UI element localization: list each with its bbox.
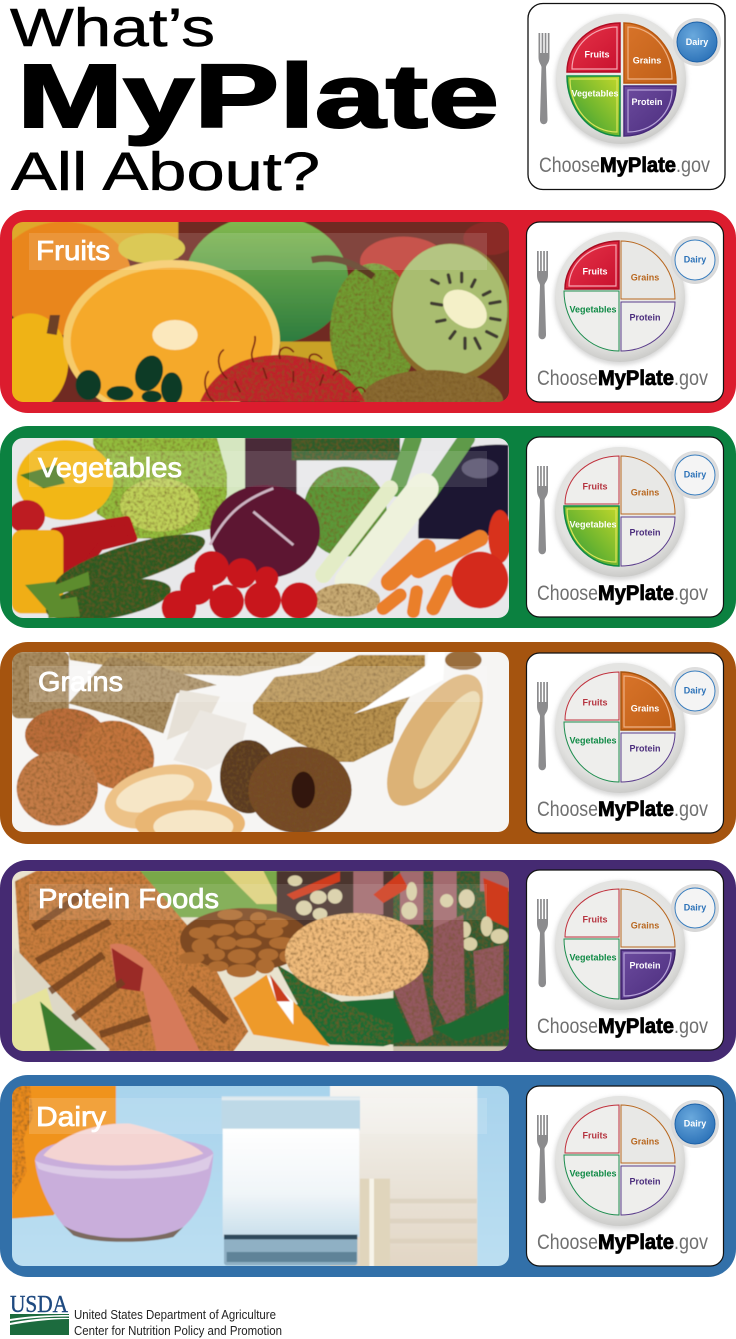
section: fruits: Fruits xyxy=(584,50,610,60)
section: grains: Grains xyxy=(633,56,661,66)
MyPlate card: Dairy xyxy=(684,902,706,912)
title: All About? xyxy=(11,142,320,202)
photo: dairy xyxy=(0,1082,520,1269)
MyPlate card xyxy=(526,1086,724,1266)
panel: vegetables xyxy=(0,426,736,629)
wordmark: Choose xyxy=(539,154,600,177)
wordmark: MyPlate xyxy=(600,154,676,177)
MyPlate card: Fruits xyxy=(582,1130,608,1140)
MyPlate card: Fruits xyxy=(582,482,608,492)
wordmark: .gov xyxy=(676,154,710,177)
MyPlate logo: full colour xyxy=(528,4,725,190)
heading: protein foods: Protein Foods xyxy=(38,883,219,914)
MyPlate card: Protein xyxy=(629,744,661,754)
MyPlate card: Choose xyxy=(537,1231,598,1254)
MyPlate card: Grains xyxy=(631,920,659,930)
translucent title band xyxy=(29,884,487,920)
photo: fruits xyxy=(12,222,509,402)
MyPlate card: Protein xyxy=(629,960,661,970)
MyPlate card: Vegetables xyxy=(569,304,617,314)
heading: vegetables: Vegetables xyxy=(38,452,182,483)
photo: grains xyxy=(12,652,509,832)
footer: agency text: Center for Nutrition Policy and Promotion xyxy=(74,1323,282,1338)
footer: USDA logo: USDA xyxy=(10,1292,69,1318)
photo: vegetables xyxy=(12,438,509,618)
MyPlate card: Grains xyxy=(631,1136,659,1146)
translucent title band xyxy=(29,666,487,702)
MyPlate card: MyPlate xyxy=(598,367,674,390)
section: protein: Protein xyxy=(631,97,663,107)
heading: dairy: Dairy xyxy=(36,1101,106,1132)
MyPlate card: Fruits xyxy=(582,914,608,924)
photo: protein foods xyxy=(0,868,520,1055)
MyPlate card: Choose xyxy=(537,798,598,821)
MyPlate card: .gov xyxy=(674,1231,708,1254)
panel: fruits xyxy=(0,210,736,433)
MyPlate card xyxy=(526,222,724,402)
MyPlate card: Protein xyxy=(629,528,661,538)
section: vegetables: Vegetables xyxy=(571,88,619,98)
MyPlate card: Dairy xyxy=(684,1118,706,1128)
section: dairy: Dairy xyxy=(686,37,708,47)
translucent title band xyxy=(29,451,487,487)
MyPlate card: Fruits xyxy=(582,698,608,708)
footer: USDA logo xyxy=(10,1292,69,1335)
MyPlate card: Vegetables xyxy=(569,952,617,962)
MyPlate card: Grains xyxy=(631,704,659,714)
section: fruits xyxy=(567,23,620,72)
MyPlate card: .gov xyxy=(674,1015,708,1038)
MyPlate card: Protein xyxy=(629,1176,661,1186)
panel: protein foods xyxy=(0,860,736,1062)
icon: fork xyxy=(538,33,550,124)
MyPlate card: Dairy xyxy=(684,686,706,696)
MyPlate card: MyPlate xyxy=(598,582,674,605)
MyPlate card: MyPlate xyxy=(598,1231,674,1254)
section: dairy xyxy=(673,18,721,66)
section: vegetables xyxy=(567,76,620,136)
MyPlate card: Dairy xyxy=(684,254,706,264)
title xyxy=(10,0,499,202)
MyPlate card: Protein xyxy=(629,312,661,322)
MyPlate card: Grains xyxy=(631,272,659,282)
MyPlate card xyxy=(526,870,724,1050)
wordmark xyxy=(539,154,710,177)
heading: grains: Grains xyxy=(38,666,123,697)
heading: fruits: Fruits xyxy=(36,235,110,266)
footer: agency text xyxy=(74,1307,282,1338)
translucent title band xyxy=(29,1098,487,1134)
MyPlate card: Vegetables xyxy=(569,736,617,746)
MyPlate card: .gov xyxy=(674,798,708,821)
section: protein xyxy=(624,86,676,136)
MyPlate card: .gov xyxy=(674,367,708,390)
MyPlate card: .gov xyxy=(674,582,708,605)
section: grains xyxy=(624,23,676,83)
MyPlate card: Grains xyxy=(631,488,659,498)
MyPlate card: Fruits xyxy=(582,266,608,276)
panel: dairy xyxy=(0,1075,736,1277)
footer: agency text: United States Department of Agriculture xyxy=(74,1307,276,1322)
MyPlate card: MyPlate xyxy=(598,798,674,821)
MyPlate card: Choose xyxy=(537,582,598,605)
MyPlate card: Dairy xyxy=(684,470,706,480)
MyPlate card: Choose xyxy=(537,1015,598,1038)
plate xyxy=(555,15,687,147)
panel: grains xyxy=(0,642,736,847)
MyPlate card: MyPlate xyxy=(598,1015,674,1038)
MyPlate card: Vegetables xyxy=(569,520,617,530)
title: MyPlate xyxy=(17,47,499,147)
translucent title band xyxy=(29,233,487,270)
MyPlate card: Choose xyxy=(537,367,598,390)
MyPlate card xyxy=(526,653,724,833)
MyPlate card: Vegetables xyxy=(569,1168,617,1178)
MyPlate card xyxy=(526,437,724,617)
